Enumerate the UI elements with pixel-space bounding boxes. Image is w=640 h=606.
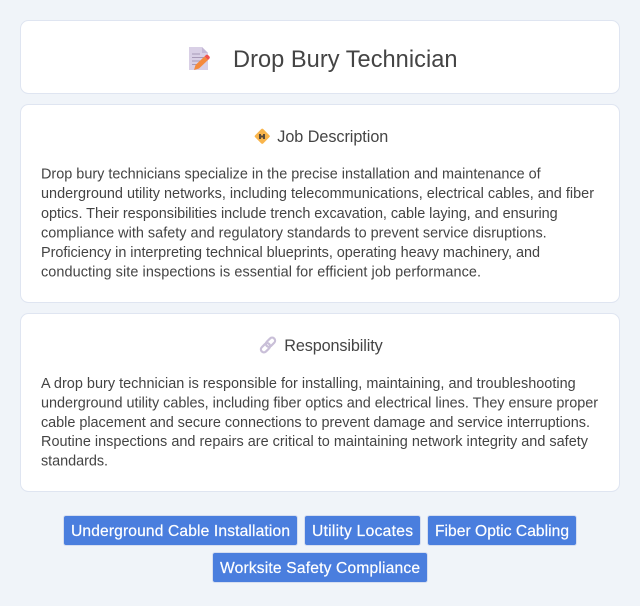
tag: underground cable installation <box>64 516 298 546</box>
text block: responsibility: standards. <box>41 454 108 470</box>
panel: job description <box>20 104 620 302</box>
icon: document with pencil <box>189 47 210 70</box>
text block: responsibility: cable placement and secure connections to prevent damage and service interruptions. <box>41 415 590 431</box>
heading: responsibility: Responsibility <box>284 337 384 355</box>
text block: job description: compliance with safety and regulatory standards to prevent service disruptions. <box>41 226 547 242</box>
text block: job description: Drop bury technicians specialize in the precise installation and maintenance of <box>41 166 542 182</box>
title: Drop Bury Technician <box>233 47 458 73</box>
tag: utility locates <box>304 516 420 546</box>
text block: job description: Proficiency in interpreting technical blueprints, operating heavy machinery, and <box>41 245 540 261</box>
text block: responsibility: underground utility cables, including fiber optics and electrical lines. They ensure proper <box>41 396 598 412</box>
heading: job description: Job Description <box>277 128 388 146</box>
tag: fiber optic cabling: Fiber Optic Cabling <box>435 523 569 540</box>
text block: job description: optics. Their responsibilities include trench excavation, cable laying, and ensuring <box>41 206 558 222</box>
text block: job description: conducting site inspections is essential for efficient job performance. <box>41 264 481 280</box>
icon: road work diamond <box>254 128 270 144</box>
text block: job description <box>41 166 594 280</box>
tag: fiber optic cabling <box>428 516 576 546</box>
text block: job description: underground utility networks, including telecommunications, electrical cables, and fiber <box>41 186 594 202</box>
skill tags <box>64 516 576 582</box>
text block: responsibility <box>41 376 598 470</box>
tag: utility locates: Utility Locates <box>312 523 413 540</box>
panel: responsibility <box>20 314 620 492</box>
icon: chain link <box>260 336 276 354</box>
tag: worksite safety compliance <box>212 552 428 582</box>
text block: responsibility: A drop bury technician is responsible for installing, maintaining, and troubleshooting <box>41 376 576 392</box>
tag: worksite safety compliance: Worksite Safety Compliance <box>220 560 420 577</box>
panel: header <box>20 20 620 94</box>
tag: underground cable installation: Underground Cable Installation <box>71 523 290 540</box>
text block: responsibility: Routine inspections and repairs are critical to maintaining network integrity and safety <box>41 434 589 450</box>
